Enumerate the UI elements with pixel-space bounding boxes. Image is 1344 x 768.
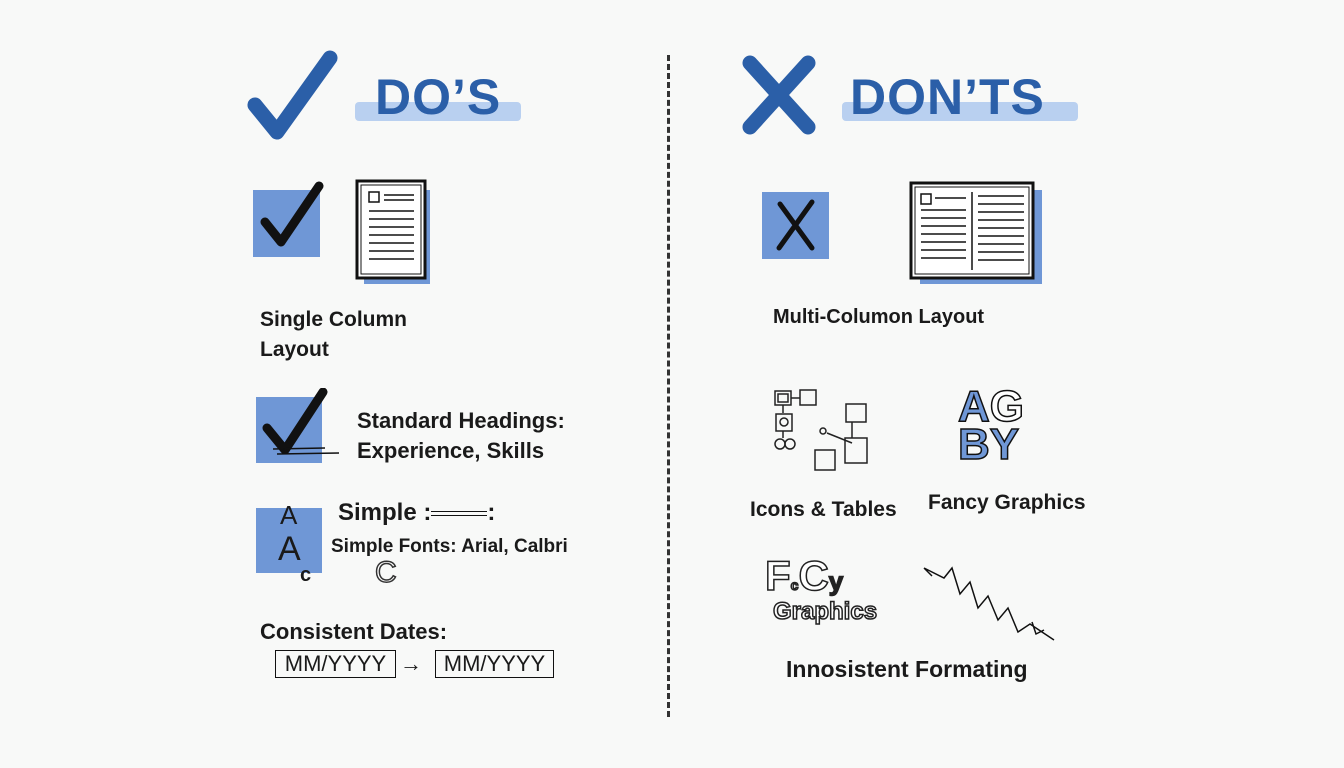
icon: fonts square: A	[278, 530, 301, 568]
text: multi-columon layout: Multi-Columon Layout	[773, 306, 984, 328]
text: icons & tables: Icons & Tables	[750, 498, 897, 521]
divider	[667, 55, 670, 717]
icon: fonts square: c	[300, 564, 311, 586]
icon: fcy graphics: Graphics	[773, 598, 877, 625]
icon: check square 2	[256, 388, 339, 463]
dates diagram: →	[400, 651, 422, 676]
icon: icons network	[774, 389, 868, 471]
text: consistent dates: Consistent Dates:	[260, 619, 447, 644]
text: single column layout	[260, 308, 407, 361]
heading: don'ts: DON’TS	[850, 69, 1045, 125]
icon: fancy letters	[958, 382, 1024, 469]
icon: single column document	[356, 180, 430, 284]
text: standard headings: Standard Headings:	[357, 408, 565, 433]
icon: fancy letters: AG	[958, 382, 1024, 431]
icon: big x	[742, 56, 816, 134]
dates diagram: MM/YYYY	[285, 651, 386, 676]
dates diagram: MM/YYYY	[444, 651, 545, 676]
text: simple: Simple : :	[338, 499, 495, 526]
dates diagram	[275, 650, 554, 678]
icon: fonts square	[256, 500, 322, 586]
text: innosistent formating: Innosistent Formating	[786, 656, 1028, 682]
heading: do's: DO’S	[375, 69, 501, 125]
icon: multi column document	[910, 182, 1042, 284]
icon: check square 1	[253, 182, 324, 257]
icon: fonts square: A	[280, 500, 297, 530]
text: single column layout: Single Column	[260, 308, 407, 331]
icon: x square	[762, 192, 829, 259]
icon: zigzag	[924, 566, 1054, 641]
text: standard headings	[357, 408, 565, 463]
text: single column layout: Layout	[260, 338, 329, 361]
icon: fancy letters: BY	[958, 420, 1019, 469]
icon: letter c: C	[375, 556, 397, 589]
icon: fcy graphics: FcCy	[765, 552, 843, 599]
text: simple fonts: Simple Fonts: Arial, Calbri	[331, 536, 568, 557]
icon: fcy graphics	[765, 552, 877, 625]
icon: big check	[248, 50, 338, 140]
text: standard headings: Experience, Skills	[357, 438, 544, 463]
text: fancy graphics: Fancy Graphics	[928, 491, 1086, 514]
